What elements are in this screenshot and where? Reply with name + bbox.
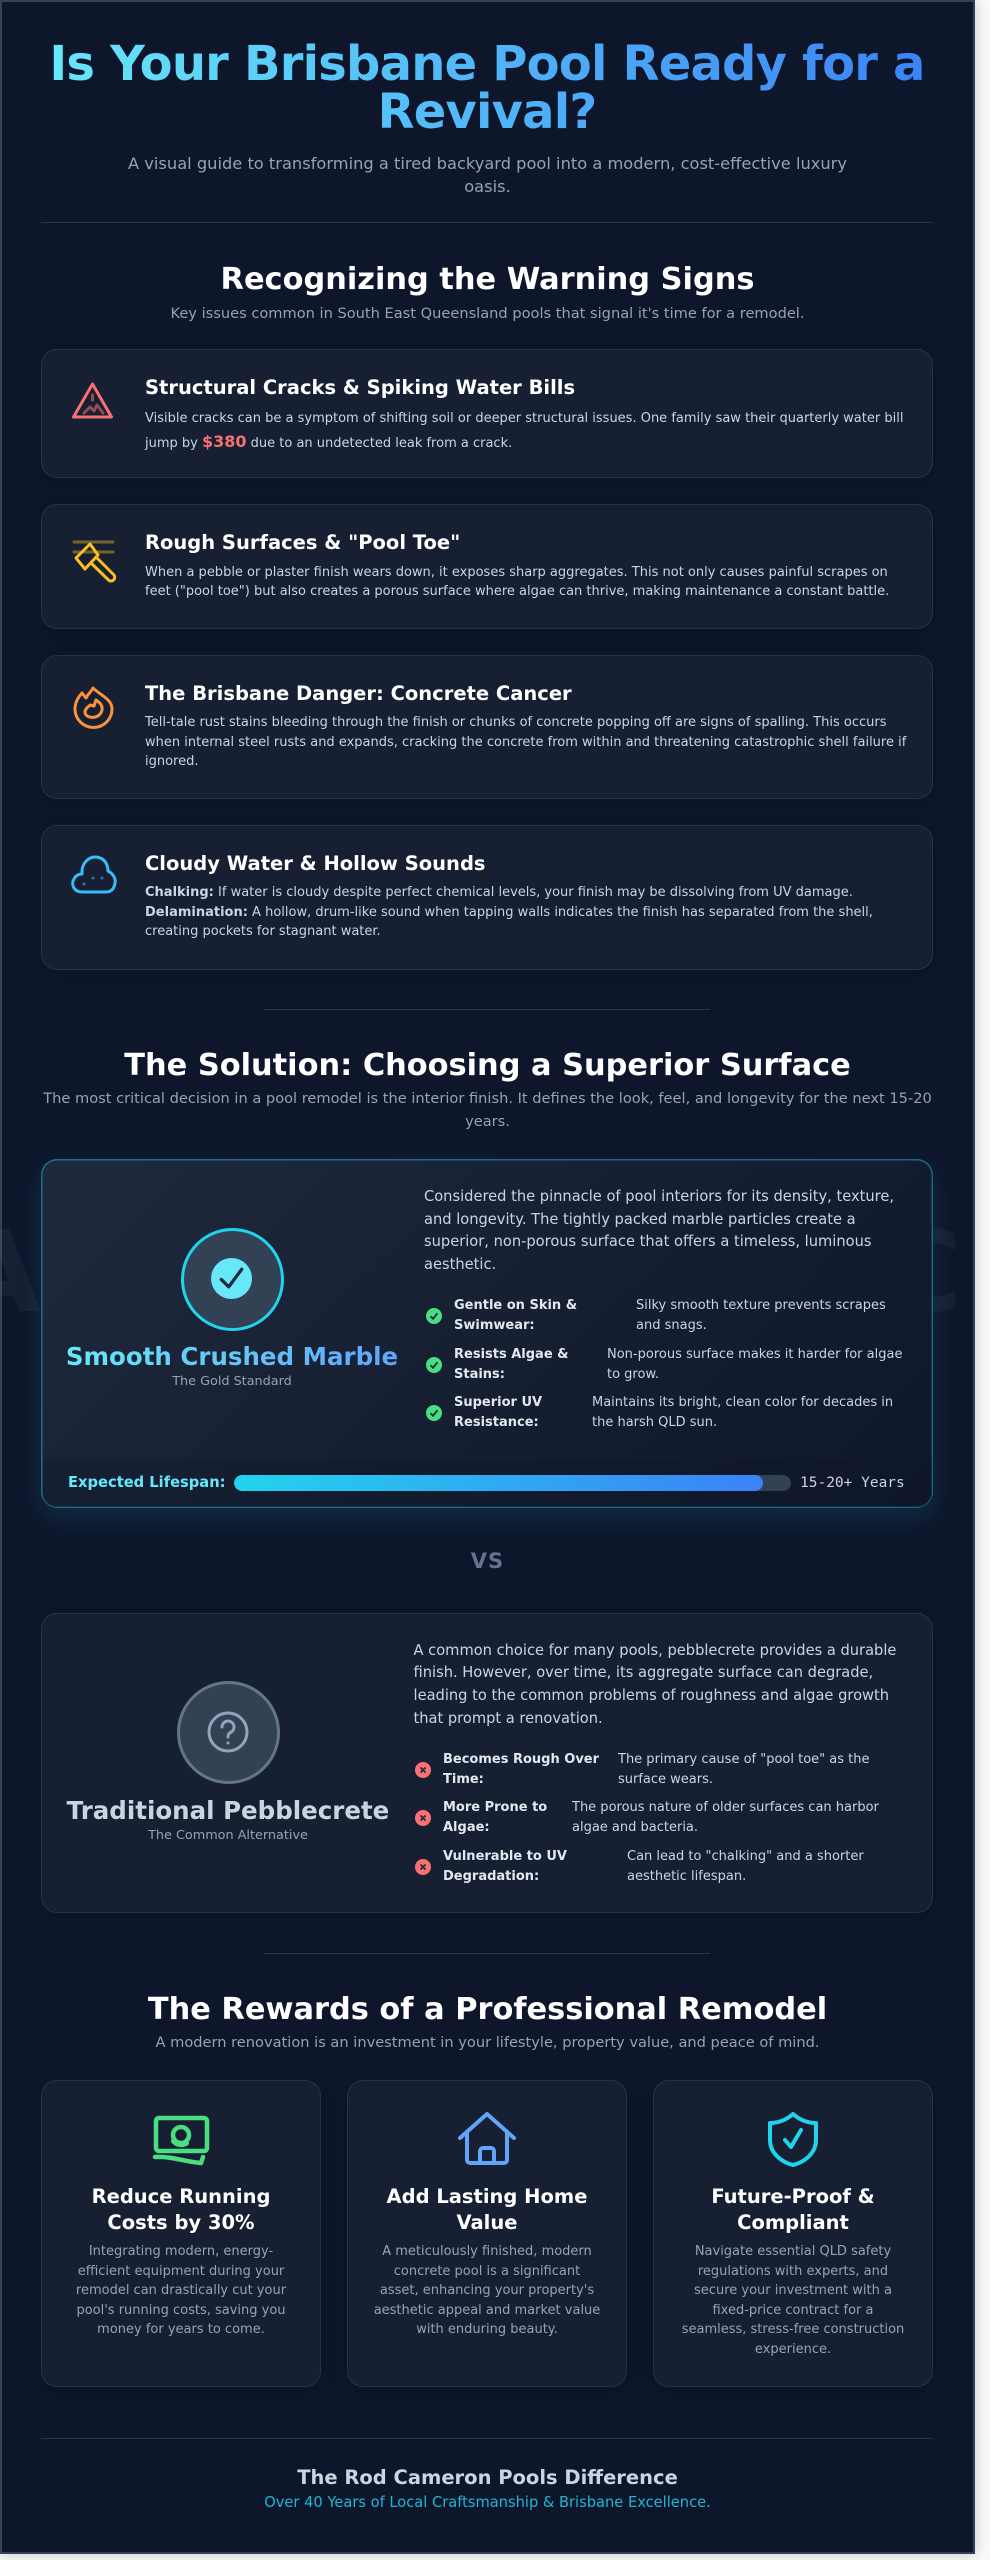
- card text: Chalking: If water is cloudy despite perfect chemical levels, your finish may be dissolving from UV damage.: [145, 885, 853, 900]
- pebblecrete tagline: The Common Alternative: [148, 1828, 308, 1843]
- drawback: rough: [415, 1752, 870, 1786]
- panel: concrete cancer: [41, 655, 933, 799]
- drawback: algae: algae and bacteria.: [572, 1820, 698, 1834]
- heading: solution: The Solution: Choosing a Superior Surface: [124, 1048, 851, 1082]
- card text: [144, 410, 903, 450]
- benefit text: efficient equipment during your: [78, 2264, 284, 2278]
- benefit: uv resistance: [426, 1395, 893, 1430]
- card text: Tell-tale rust stains bleeding through the finish or chunks of concrete popping off are signs of spalling. This occurs: [145, 715, 886, 730]
- benefit: gentle on skin: Silky smooth texture prevents scrapes: [636, 1298, 886, 1313]
- marble description: superior, non-porous surface that offers a timeless, luminous: [424, 1233, 872, 1250]
- icon: cloud: [71, 856, 117, 894]
- benefit: resists algae: Non-porous surface makes it harder for algae: [607, 1347, 902, 1362]
- benefit heading: Costs by 30%: [107, 2211, 255, 2234]
- solution intro: years.: [465, 1113, 510, 1130]
- benefit: uv resistance: the harsh QLD sun.: [592, 1414, 717, 1430]
- benefit heading: Reduce Running: [92, 2185, 270, 2208]
- pebblecrete description: A common choice for many pools, pebblecrete provides a durable: [414, 1642, 896, 1659]
- benefit: resists algae: Resists Algae &: [454, 1347, 569, 1362]
- footer tagline: Over 40 Years of Local Craftsmanship & Brisbane Excellence.: [264, 2494, 711, 2511]
- marble description: aesthetic.: [424, 1256, 496, 1273]
- drawback: uv: [415, 1849, 864, 1884]
- benefit text: Integrating modern, energy-: [89, 2244, 273, 2259]
- drawback: rough: surface wears.: [618, 1772, 713, 1786]
- drawback: uv: aesthetic lifespan.: [627, 1868, 746, 1884]
- drawback: algae: Algae:: [443, 1820, 490, 1834]
- panel: structural cracks: [41, 349, 933, 478]
- panel: future-proof: [653, 2080, 933, 2387]
- icon: money: [152, 2116, 210, 2166]
- benefit text: secure your investment with a: [694, 2283, 892, 2298]
- card text: [145, 885, 873, 939]
- benefit text: Navigate essential QLD safety: [695, 2244, 891, 2259]
- benefit heading: [92, 2185, 270, 2234]
- lifespan value: 15-20+ Years: [800, 1475, 905, 1491]
- benefit text: with enduring beauty.: [416, 2322, 558, 2337]
- card text: [144, 715, 907, 769]
- benefit: gentle on skin: Gentle on Skin &: [454, 1298, 577, 1313]
- icon: check badge: [180, 1228, 284, 1330]
- drawback: uv: Vulnerable to UV: [443, 1849, 567, 1864]
- card text: ignored.: [145, 754, 198, 769]
- panel: home value: [347, 2080, 627, 2387]
- benefit heading: [711, 2185, 875, 2234]
- benefit: gentle on skin: Swimwear:: [454, 1318, 535, 1332]
- pebblecrete description: [414, 1642, 896, 1727]
- benefit text: seamless, stress-free construction: [682, 2322, 904, 2337]
- panel: smooth crushed marble: [41, 1159, 933, 1508]
- drawback: algae: More Prone to: [443, 1800, 547, 1815]
- benefit text: A meticulously finished, modern: [382, 2244, 592, 2259]
- subtitle: oasis.: [464, 176, 511, 196]
- watermark text: [0, 1208, 962, 1338]
- card text: [145, 564, 889, 599]
- marble heading: Smooth Crushed Marble: [66, 1342, 398, 1371]
- solution intro: [43, 1090, 932, 1130]
- icon: warning triangle: [72, 382, 114, 418]
- benefit text: fixed-price contract for a: [712, 2302, 874, 2318]
- benefit: gentle on skin: and snags.: [636, 1318, 707, 1332]
- benefit text: pool's running costs, saving you: [76, 2302, 286, 2318]
- card heading: The Brisbane Danger: Concrete Cancer: [145, 682, 572, 705]
- lifespan label: Expected Lifespan:: [68, 1474, 226, 1491]
- benefit: uv resistance: Resistance:: [454, 1414, 539, 1430]
- benefit: resists algae: Stains:: [454, 1366, 505, 1382]
- benefit: uv resistance: Maintains its bright, clean color for decades in: [592, 1395, 893, 1410]
- benefit heading: Compliant: [737, 2211, 849, 2234]
- pebblecrete heading: Traditional Pebblecrete: [67, 1796, 389, 1825]
- pebblecrete description: leading to the common problems of roughness and algae growth: [414, 1687, 889, 1704]
- card text: when internal steel rusts and expands, cracking the concrete from within and threatening catastrophic shell failure if: [145, 735, 906, 750]
- benefit heading: Value: [456, 2211, 517, 2234]
- pebblecrete description: that prompt a renovation.: [414, 1710, 603, 1727]
- vs label: VS: [471, 1549, 504, 1573]
- benefit text: [374, 2244, 600, 2337]
- card text: creating pockets for stagnant water.: [145, 924, 381, 939]
- title: Revival?: [378, 84, 596, 140]
- subtitle: A visual guide to transforming a tired backyard pool into a modern, cost-effective luxury: [128, 154, 847, 172]
- footer title: The Rod Cameron Pools Difference: [297, 2466, 678, 2489]
- drawback: uv: Degradation:: [443, 1868, 539, 1884]
- panel: reduce running costs: [41, 2080, 321, 2387]
- lifespan strip background: [42, 1459, 932, 1506]
- solution intro: The most critical decision in a pool remodel is the interior finish. It defines the look, feel, and longevity for the next 15-20: [43, 1090, 932, 1107]
- benefit text: [76, 2244, 286, 2337]
- card text: jump by $380 due to an undetected leak from a crack.: [145, 432, 512, 450]
- lifespan bar: [234, 1475, 791, 1491]
- watermark text: C: [880, 1208, 962, 1338]
- card text: When a pebble or plaster finish wears down, it exposes sharp aggregates. This not only causes painful scrapes on: [145, 564, 888, 580]
- benefit text: aesthetic appeal and market value: [374, 2302, 600, 2318]
- benefit: uv resistance: Superior UV: [454, 1395, 542, 1410]
- drawback: rough: The primary cause of "pool toe" as the: [618, 1752, 870, 1767]
- warning signs intro: Key issues common in South East Queensland pools that signal it's time for a remodel.: [170, 304, 804, 322]
- card text: Visible cracks can be a symptom of shifting soil or deeper structural issues. One family saw their quarterly water bill: [145, 410, 903, 426]
- icon: question badge: [177, 1681, 280, 1784]
- marble tagline: The Gold Standard: [172, 1374, 292, 1389]
- panel: cloudy water: [41, 825, 933, 970]
- benefit text: remodel can drastically cut your: [76, 2283, 286, 2298]
- title: [41, 40, 933, 136]
- benefit heading: Future-Proof &: [711, 2185, 875, 2208]
- pebblecrete description: finish. However, over time, its aggregate surface can degrade,: [414, 1664, 873, 1681]
- heading: rewards: The Rewards of a Professional Remodel: [148, 1992, 827, 2026]
- benefit: resists algae: to grow.: [607, 1366, 659, 1382]
- benefit heading: [386, 2185, 587, 2234]
- benefit heading: Add Lasting Home: [387, 2185, 587, 2208]
- card heading: Rough Surfaces & "Pool Toe": [145, 531, 460, 554]
- icon: house: [458, 2112, 516, 2165]
- marble description: and longevity. The tightly packed marble particles create a: [424, 1211, 856, 1228]
- benefit text: [682, 2244, 904, 2356]
- rewards intro: A modern renovation is an investment in your lifestyle, property value, and peace of mind.: [155, 2034, 820, 2051]
- drawback: algae: The porous nature of older surfaces can harbor: [572, 1800, 879, 1815]
- icon: hammer: [72, 540, 116, 582]
- card heading: Structural Cracks & Spiking Water Bills: [145, 376, 575, 399]
- drawback: algae: [415, 1800, 879, 1834]
- marble description: Considered the pinnacle of pool interiors for its density, texture,: [424, 1188, 894, 1205]
- drawback: rough: Time:: [443, 1772, 484, 1786]
- drawback: uv: Can lead to "chalking" and a shorter: [627, 1849, 864, 1864]
- benefit text: money for years to come.: [97, 2322, 265, 2337]
- benefit text: concrete pool is a significant: [394, 2264, 580, 2278]
- card heading: Cloudy Water & Hollow Sounds: [145, 852, 486, 875]
- icon: flame: [74, 686, 114, 729]
- heading: warning signs: Recognizing the Warning Signs: [221, 262, 754, 296]
- icon: shield: [768, 2112, 818, 2167]
- subtitle: [128, 154, 847, 196]
- card text: feet ("pool toe") but also creates a porous surface where algae can thrive, making maintenance a constant battle.: [145, 584, 889, 599]
- title: Is Your Brisbane Pool Ready for a: [49, 36, 925, 92]
- benefit text: regulations with experts, and: [698, 2264, 888, 2278]
- benefit text: experience.: [755, 2342, 831, 2356]
- benefit: gentle on skin: [426, 1298, 886, 1332]
- drawback: rough: Becomes Rough Over: [443, 1752, 599, 1767]
- marble description: [424, 1188, 894, 1273]
- card text: Delamination: A hollow, drum-like sound when tapping walls indicates the finish has separated from the shell,: [145, 905, 873, 920]
- benefit text: asset, enhancing your property's: [380, 2283, 594, 2298]
- panel: traditional pebblecrete: [41, 1613, 933, 1913]
- panel: rough surfaces: [41, 504, 933, 629]
- benefit: resists algae: [426, 1347, 902, 1382]
